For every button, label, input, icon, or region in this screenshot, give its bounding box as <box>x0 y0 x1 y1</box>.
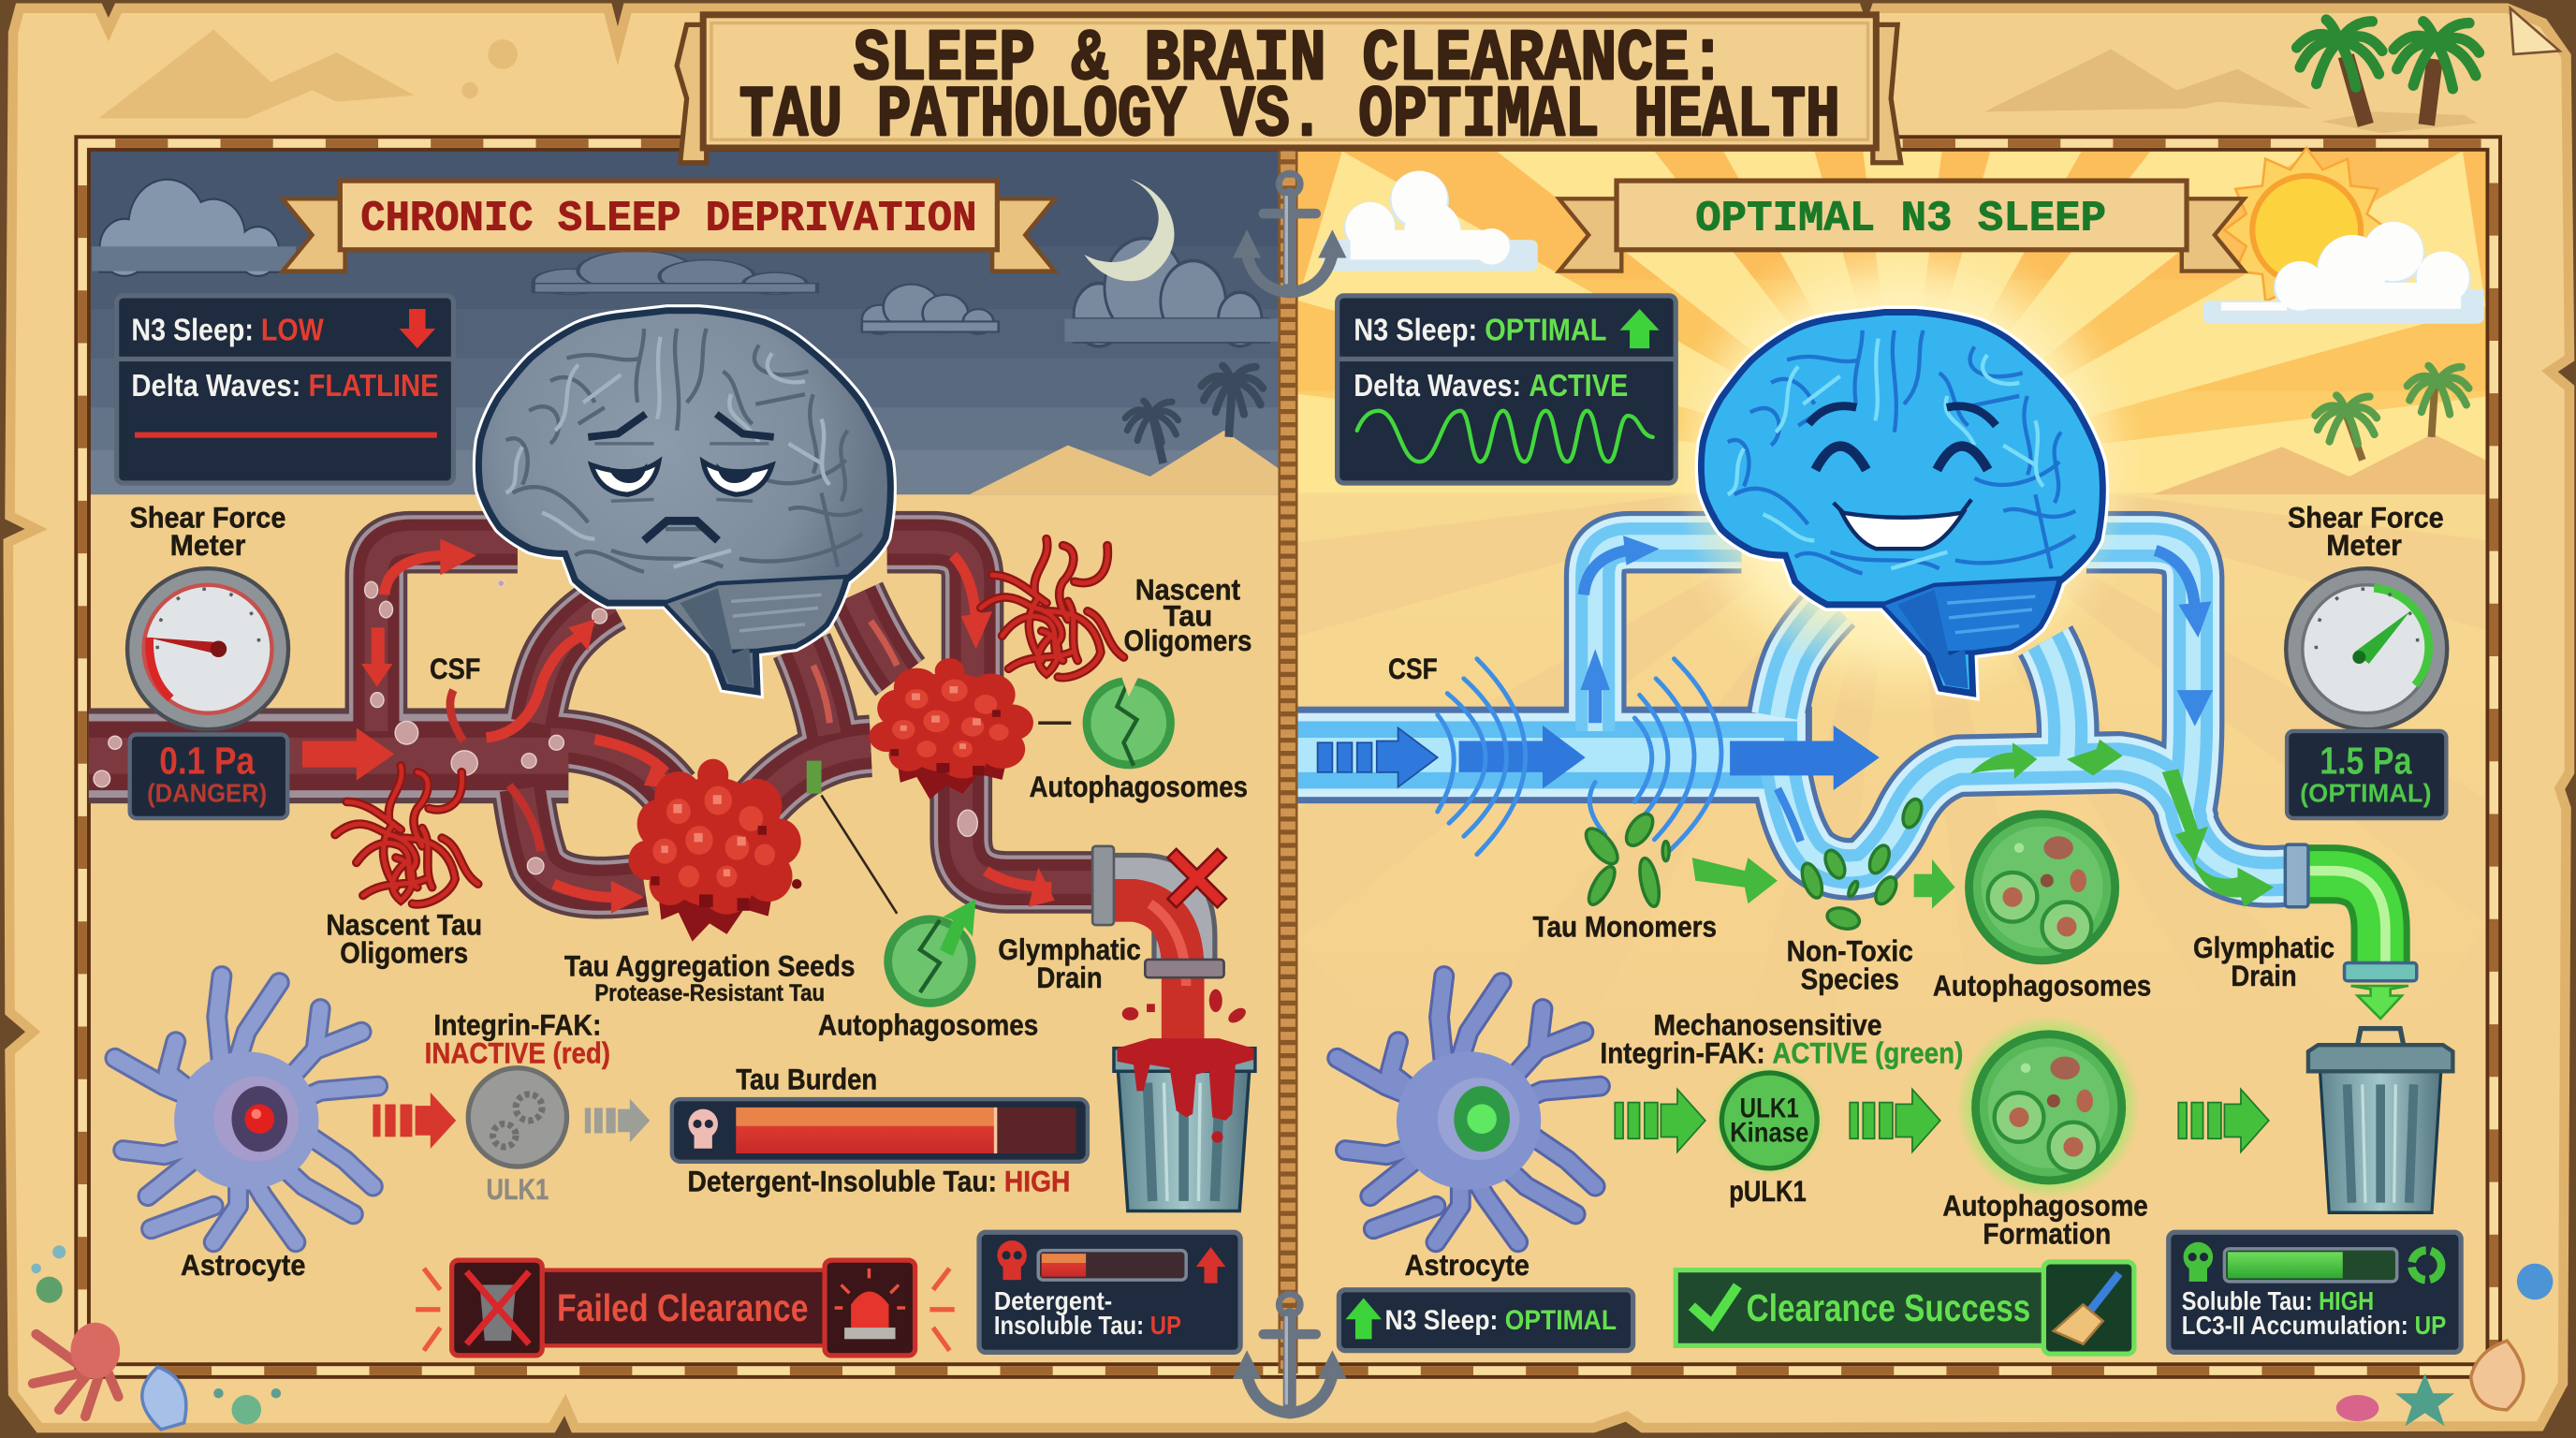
pressure readout 1.5 Pa: (OPTIMAL) <box>2300 778 2432 807</box>
shear force gauge left <box>127 568 288 729</box>
non-toxic species beans <box>1798 797 1925 932</box>
left process labels: Glymphatic <box>998 932 1141 966</box>
title banner <box>677 15 1901 163</box>
ULK1 inactive disc <box>468 1068 567 1167</box>
beach decor bottom left <box>31 1245 281 1430</box>
clot: upper aggregate <box>869 658 1033 800</box>
active signal arrows <box>1615 1090 2269 1152</box>
pressure readout 1.5 Pa: 1.5 Pa <box>2320 740 2412 783</box>
right process labels: Astrocyte <box>1405 1248 1530 1282</box>
left process labels: Detergent-Insoluble Tau: HIGH <box>688 1164 1070 1197</box>
icon: orange shell <box>2471 1341 2524 1410</box>
banner: optimal N3 sleep: OPTIMAL N3 SLEEP <box>1695 195 2106 243</box>
icon: blue shell <box>142 1367 186 1430</box>
delta wave trace <box>1357 411 1653 462</box>
icon: crossed out trash <box>466 1271 529 1344</box>
soluble tau status panel: LC3-II Accumulation: UP <box>2182 1311 2446 1340</box>
parchment decoration: faint dunes top left <box>98 30 518 118</box>
right sky details: clouds, sun, palms, dunes <box>1323 148 2485 494</box>
banner: optimal N3 sleep <box>1559 181 2244 271</box>
left process labels: Nascent <box>1135 573 1241 607</box>
right process labels: Autophagosomes <box>1933 969 2151 1003</box>
left process labels: Oligomers <box>340 935 468 969</box>
tau tangle upper right <box>981 539 1123 678</box>
icon: blue shell <box>2517 1264 2553 1299</box>
icon: sun <box>2224 148 2389 312</box>
ULK1 kinase disc: Kinase <box>1730 1118 1808 1149</box>
bubbles <box>94 580 977 874</box>
failed clearance bar <box>416 1260 955 1356</box>
right status panel: Delta Waves: ACTIVE <box>1354 369 1628 404</box>
right status panel <box>1338 296 1676 483</box>
cloud upper right <box>1064 238 1278 346</box>
detergent status panel: Insoluble Tau: UP <box>994 1311 1181 1340</box>
banner: chronic sleep deprivation: CHRONIC SLEEP DEPRIVATION <box>360 195 976 243</box>
right process labels: Mechanosensitive <box>1654 1008 1881 1042</box>
icon: check mark <box>1695 1290 1734 1325</box>
small palms <box>2315 366 2468 460</box>
icon: red X <box>1177 858 1218 899</box>
icon: drain down arrow <box>2351 986 2408 1019</box>
inner frame <box>82 143 2494 1371</box>
icon: pink pebble <box>2336 1395 2378 1421</box>
right flow arrows <box>1318 536 2274 907</box>
left process labels: Protease-Resistant Tau <box>594 981 825 1006</box>
left process labels: Autophagosomes <box>818 1008 1038 1042</box>
inactive grey arrow <box>585 1099 650 1142</box>
pressure readout 0.1 Pa: (DANGER) <box>147 778 267 807</box>
alarm rays <box>416 1269 955 1351</box>
banner: chronic sleep deprivation <box>283 181 1055 271</box>
panel: optimal N3 sleep background <box>1298 151 2487 1367</box>
left drain pipe with red overflow <box>1092 846 1249 1051</box>
icon: recycle <box>2411 1251 2441 1280</box>
panel: chronic sleep deprivation background <box>89 151 1278 1367</box>
inactive signal arrow <box>373 1093 456 1149</box>
left status panel: N3 Sleep: LOW <box>131 313 324 347</box>
palm trees top right <box>2297 20 2479 133</box>
astrocyte left <box>115 976 378 1242</box>
ULK1 kinase disc <box>1714 1064 1825 1177</box>
title line 2: TAU PATHOLOGY VS. OPTIMAL HEALTH <box>739 76 1840 157</box>
stray clot fragment <box>792 879 801 888</box>
icon: red down arrow <box>399 309 435 348</box>
icon: bottom anchor <box>1236 1294 1344 1413</box>
soluble tau status panel: Soluble Tau: HIGH <box>2182 1286 2374 1315</box>
tau tangle lower left <box>335 766 478 904</box>
cracked autophagosome upper <box>1083 674 1175 769</box>
icon: top anchor <box>1236 173 1344 292</box>
failed clearance bar: Failed Clearance <box>557 1286 809 1329</box>
right process labels: Integrin-FAK: ACTIVE (green) <box>1600 1036 1963 1070</box>
N3 sleep optimal pill <box>1339 1290 1633 1351</box>
sad grey brain <box>478 311 890 692</box>
clearance success bar <box>1676 1262 2134 1354</box>
right process labels: Autophagosome <box>1942 1189 2148 1223</box>
icon: octopus <box>33 1323 120 1416</box>
autophagosome top right panel <box>1965 810 2119 964</box>
trash can right <box>2308 1029 2452 1212</box>
left flow arrows <box>302 539 1055 914</box>
right process labels: Drain <box>2231 959 2297 992</box>
left process labels: Integrin-FAK: <box>433 1008 601 1042</box>
left status panel <box>117 296 453 483</box>
green arrows to non-toxic species <box>1692 858 1955 909</box>
left pipe network: CSF and glymphatic channels <box>89 542 1101 888</box>
right process labels: Tau Monomers <box>1533 909 1717 943</box>
left process labels: Oligomers <box>1123 624 1251 657</box>
trash can left with goo <box>1114 1038 1255 1211</box>
shock wave arcs <box>1438 659 1721 855</box>
icon: crescent moon <box>1084 179 1175 281</box>
shear force gauge right <box>2286 568 2447 729</box>
center rope divider <box>1278 151 1298 1373</box>
right pipe network: healthy CSF flow <box>1298 542 2287 876</box>
green drain pipe <box>2285 844 2417 1019</box>
autophagosome formation with glow <box>1956 1016 2141 1199</box>
happy face <box>1808 406 1996 513</box>
pointer to autophagosome <box>807 761 897 914</box>
icon: skull <box>688 1109 718 1149</box>
shear force label left: Meter <box>170 528 245 562</box>
connector line to upper autophagosome <box>1038 721 1071 725</box>
N3 sleep optimal pill: N3 Sleep: OPTIMAL <box>1385 1305 1617 1336</box>
shear force label right: Shear Force <box>2288 500 2444 534</box>
CSF label left: CSF <box>430 652 480 685</box>
soluble tau status panel <box>2169 1232 2461 1352</box>
left process labels: Nascent Tau <box>326 908 482 942</box>
ULK1 kinase disc: ULK1 <box>1740 1093 1799 1123</box>
flatline trace <box>135 433 437 438</box>
healthy blue brain <box>1673 255 2132 694</box>
pressure readout 1.5 Pa <box>2287 731 2446 818</box>
tau burden bar <box>672 1099 1088 1162</box>
title line 1: SLEEP & BRAIN CLEARANCE: <box>854 20 1726 101</box>
shear force label right <box>2288 500 2444 562</box>
detergent status panel <box>979 1232 1240 1352</box>
clearance success bar: Clearance Success <box>1747 1286 2030 1329</box>
astrocyte right <box>1338 976 1600 1242</box>
CSF label right: CSF <box>1388 652 1438 685</box>
right process labels: Glymphatic <box>2193 931 2334 964</box>
left process labels: Astrocyte <box>181 1248 305 1282</box>
icon: green up arrow <box>1620 309 1660 348</box>
icon: alarm siren <box>835 1269 905 1339</box>
right process labels: Species <box>1801 962 1899 996</box>
tau monomers <box>1580 809 1669 908</box>
cracked autophagosome lower with green arrow <box>884 899 976 1007</box>
shear force label left: Shear Force <box>130 500 285 534</box>
left process labels: Tau <box>1164 599 1212 633</box>
pressure readout 0.1 Pa: 0.1 Pa <box>159 740 256 783</box>
icon: small sea pebbles <box>31 1245 281 1425</box>
icon: broom <box>2054 1273 2119 1344</box>
left process labels: Tau Aggregation Seeds <box>564 948 856 982</box>
cloud upper left <box>92 181 296 275</box>
right process labels <box>1405 909 2334 1282</box>
right status panel: N3 Sleep: OPTIMAL <box>1354 313 1606 347</box>
left process labels <box>181 573 1251 1282</box>
pressure readout 0.1 Pa <box>130 734 287 818</box>
icon: starfish <box>2395 1373 2454 1426</box>
clot: tau aggregation seed <box>628 759 801 942</box>
detergent status panel: Detergent- <box>994 1286 1112 1315</box>
parchment decoration: faint dunes top right <box>1984 50 2311 111</box>
right process labels: pULK1 <box>1729 1174 1807 1208</box>
right process labels: Non-Toxic <box>1787 934 1913 968</box>
shear force label right: Meter <box>2326 528 2402 562</box>
left sky details: clouds, moon, palms, dunes <box>92 179 1278 494</box>
white cloud left <box>1323 171 1538 271</box>
right process labels: Formation <box>1983 1217 2111 1251</box>
left process labels: INACTIVE (red) <box>425 1036 610 1070</box>
left process labels: ULK1 <box>487 1172 549 1206</box>
beach decor bottom right <box>2336 1264 2553 1426</box>
splashes <box>1122 990 1249 1026</box>
corner fold <box>2510 8 2559 54</box>
white cloud right <box>2203 222 2484 324</box>
dark palms <box>1125 366 1263 463</box>
left process labels: Autophagosomes <box>1030 770 1248 803</box>
shear force label left <box>130 500 285 562</box>
left process labels: Tau Burden <box>736 1063 877 1096</box>
left process labels: Drain <box>1036 961 1103 994</box>
sad face <box>588 414 774 540</box>
left status panel: Delta Waves: FLATLINE <box>131 369 439 404</box>
